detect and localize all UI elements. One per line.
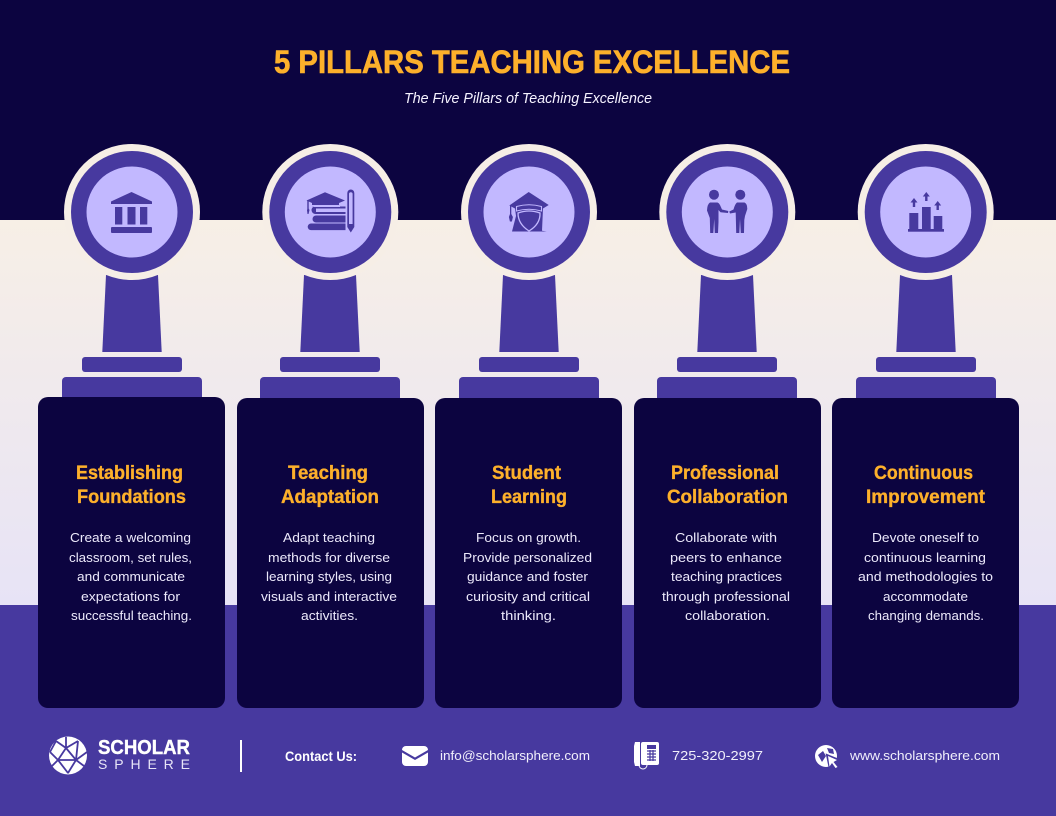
icon: globe with cursor [815,745,838,769]
card 4 [634,398,821,708]
logo: ScholarSphere [49,736,191,774]
card 3 body: Provide personalized [463,550,592,565]
card 3 heading: Learning [491,486,567,508]
background: navy header band [0,0,1056,220]
card 2 heading: Adaptation [281,486,379,508]
card 5 body: accommodate [883,589,968,604]
footer divider [240,740,242,772]
email address: info@scholarsphere.com [440,748,590,763]
card 4 heading: Collaboration [667,486,788,508]
card 4 heading [667,462,788,508]
card 3 body: curiosity and critical [466,589,590,604]
card 2 body: visuals and interactive [261,589,397,604]
card 4 body: through professional [662,589,790,604]
card 1 [38,397,225,708]
card 2 heading: Teaching [288,462,368,484]
card 1 body [69,530,192,623]
pillar 1 medallion [64,144,200,280]
card 1 heading: Foundations [77,486,186,508]
background: cream gradient band [0,220,1056,605]
pillar 2: Teaching Adaptation [237,144,424,708]
card 1 heading [76,462,186,508]
card 5 heading: Continuous [874,462,973,484]
pillar 1: Establishing Foundations [38,144,225,708]
icon: books, cap and pencil [306,190,354,232]
pillar 2 shaft and bases [260,275,400,398]
card 5 heading: Improvement [866,486,985,508]
card 5 [832,398,1019,708]
pillar 3 medallion [461,144,597,280]
card 1 body: successful teaching. [71,608,192,623]
card 5 body: and methodologies to [858,569,993,584]
card 3 heading [491,462,567,508]
icon: rising bars with arrows [908,192,944,232]
card 1 body: and communicate [77,569,185,584]
card 5 body [858,530,993,623]
card 5 body: Devote oneself to [872,530,979,545]
card 4 body: Collaborate with [675,530,777,545]
card 4 body: collaboration. [685,608,770,623]
card 4 body: teaching practices [671,569,783,584]
icon: faceted globe [49,736,87,774]
card 2 body: Adapt teaching [283,530,375,545]
card 3 body: thinking. [501,608,556,623]
title: 5 PILLARS TEACHING EXCELLENCE [274,44,790,80]
card 2 [237,398,424,708]
card 4 heading: Professional [671,462,779,484]
pillar 5: Continuous Improvement [832,144,1019,708]
icon: graduate with cap [509,192,549,232]
pillar 1 shaft and bases [62,275,202,398]
phone number: 725-320-2997 [672,748,763,763]
pillar 2 medallion [262,144,398,280]
card 5 body: continuous learning [864,550,986,565]
card 2 body: learning styles, using [266,569,392,584]
pillar 3 shaft and bases [459,275,599,398]
card 1 body: Create a welcoming [70,530,191,545]
icon: classical building [111,192,152,233]
pillar 4 shaft and bases [657,275,797,398]
card 2 heading [281,462,379,508]
card 3 heading: Student [492,462,561,484]
card 4 body: peers to enhance [670,550,782,565]
card 3 body [463,530,592,623]
website address: www.scholarsphere.com [849,748,1000,763]
card 1 heading: Establishing [76,462,183,484]
card 3 body: Focus on growth. [476,530,581,545]
card 2 body [261,530,397,623]
card 1 body: classroom, set rules, [69,550,192,565]
card 5 body: changing demands. [868,608,984,623]
pillar 5 shaft and bases [856,275,996,398]
card 3 body: guidance and foster [467,569,589,584]
logo wordmark [98,737,191,772]
card 4 body [662,530,790,623]
icon: envelope [402,746,428,766]
card 2 body: methods for diverse [268,550,390,565]
icon: desk phone [634,742,659,769]
card 2 body: activities. [301,608,358,623]
card 3 [435,398,622,708]
card 1 body: expectations for [81,589,181,604]
contact: email [402,746,590,766]
background: purple footer band [0,605,1056,816]
icon: two people shaking hands [707,190,747,233]
subtitle: The Five Pillars of Teaching Excellence [404,90,652,107]
contact label: Contact Us: [285,748,357,764]
contact: phone [634,742,763,769]
pillar 4: Professional Collaboration [634,144,821,708]
contact: website [815,745,1000,769]
pillar 5 medallion [858,144,994,280]
footer [49,736,1000,774]
pillar 4 medallion [659,144,795,280]
logo wordmark: SPHERE [98,756,190,772]
logo wordmark: SCHOLAR [98,737,191,759]
pillar 3: Student Learning [435,144,622,708]
card 5 heading [866,462,985,508]
